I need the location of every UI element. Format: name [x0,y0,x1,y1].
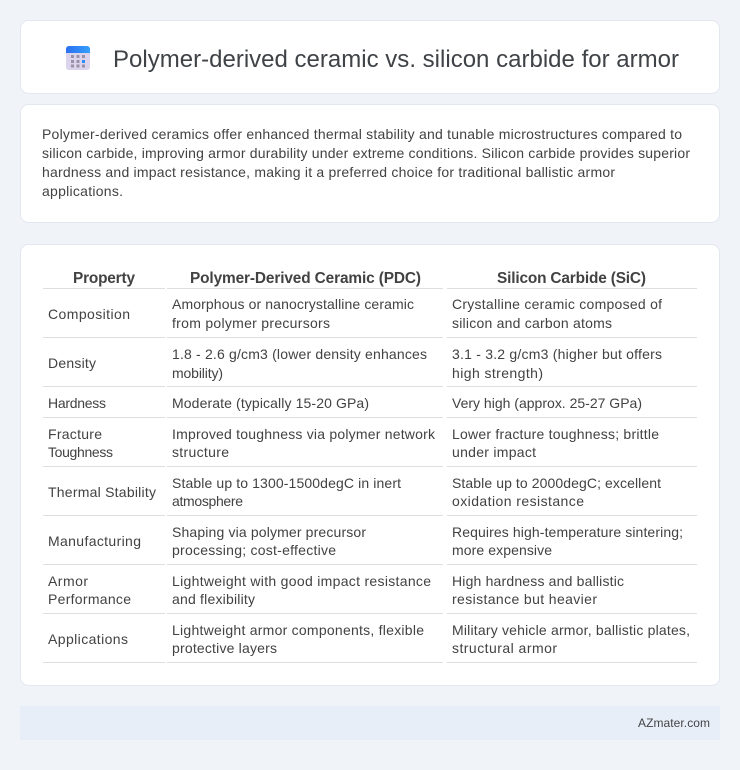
footer credit: AZmater.com [638,716,710,730]
row: fracture toughness [48,426,659,460]
row: thermal stability [48,475,661,509]
intro text: applications. [42,183,123,199]
row: composition [48,296,662,331]
row: applications: protective layers [172,640,277,656]
row: manufacturing: Requires high-temperature sintering; [452,524,683,540]
row: density: 3.1 - 3.2 g/cm3 (higher but offers [452,346,662,362]
row: fracture toughness: Fracture [48,426,102,442]
row: applications: Lightweight armor components, flexible [172,622,424,638]
panel: title card [20,20,720,94]
table header: Property [73,270,135,287]
row: fracture toughness: Lower fracture toughness; brittle [452,426,659,442]
row: thermal stability: Stable up to 1300-1500degC in inert [172,475,401,491]
row: applications: Military vehicle armor, ballistic plates, [452,622,690,638]
row: hardness: Moderate (typically 15-20 GPa) [172,395,369,411]
row: manufacturing: Shaping via polymer precursor [172,524,366,540]
footer [20,706,720,740]
row: thermal stability: Stable up to 2000degC; excellent [452,475,661,491]
row: fracture toughness: under impact [452,444,536,460]
row: fracture toughness: Toughness [48,444,113,460]
table header: Polymer-Derived Ceramic (PDC) [190,270,421,287]
row: composition: Composition [48,306,130,322]
row: armor performance: High hardness and ballistic [452,573,624,589]
row: density [48,346,662,381]
intro text: Polymer-derived ceramics offer enhanced thermal stability and tunable microstructures compared to [42,126,682,142]
panel: introduction [20,104,720,222]
row: armor performance: Armor [48,573,88,589]
row: applications [48,622,690,656]
row: thermal stability: oxidation resistance [452,493,584,509]
row: applications: structural armor [452,640,557,656]
row: hardness: Hardness [48,395,106,411]
table header [73,270,646,287]
row: armor performance [48,573,624,607]
row: composition: from polymer precursors [172,315,330,331]
row: manufacturing: processing; cost-effective [172,542,336,558]
row: manufacturing [48,524,683,558]
row: fracture toughness: Improved toughness via polymer network [172,426,436,442]
title: Polymer-derived ceramic vs. silicon carbide for armor [113,46,679,73]
row: thermal stability: Thermal Stability [48,484,156,500]
row: thermal stability: atmosphere [172,493,243,509]
panel: comparison table [20,244,720,686]
row: armor performance: resistance but heavier [452,591,597,607]
row: composition: silicon and carbon atoms [452,315,612,331]
row: manufacturing: more expensive [452,542,552,558]
row: density: high strength) [452,365,543,381]
row: fracture toughness: structure [172,444,229,460]
table header: Silicon Carbide (SiC) [497,270,646,287]
icon: calendar [66,46,90,70]
row: armor performance: Lightweight with good impact resistance [172,573,431,589]
intro text: hardness and impact resistance, making it a preferred choice for traditional ballistic armor [42,164,615,180]
row: composition: Amorphous or nanocrystalline ceramic [172,296,414,312]
row: armor performance: Performance [48,591,131,607]
intro text [42,126,690,199]
row: density: 1.8 - 2.6 g/cm3 (lower density enhances [172,346,427,362]
row: hardness: Very high (approx. 25-27 GPa) [452,395,642,411]
row: density: mobility) [172,365,223,381]
row: density: Density [48,355,96,371]
row: hardness [48,395,642,411]
row: manufacturing: Manufacturing [48,533,141,549]
row: armor performance: and flexibility [172,591,255,607]
intro text: silicon carbide, improving armor durability under extreme conditions. Silicon carbide provides superior [42,145,690,161]
row: applications: Applications [48,631,128,647]
row: composition: Crystalline ceramic composed of [452,296,662,312]
